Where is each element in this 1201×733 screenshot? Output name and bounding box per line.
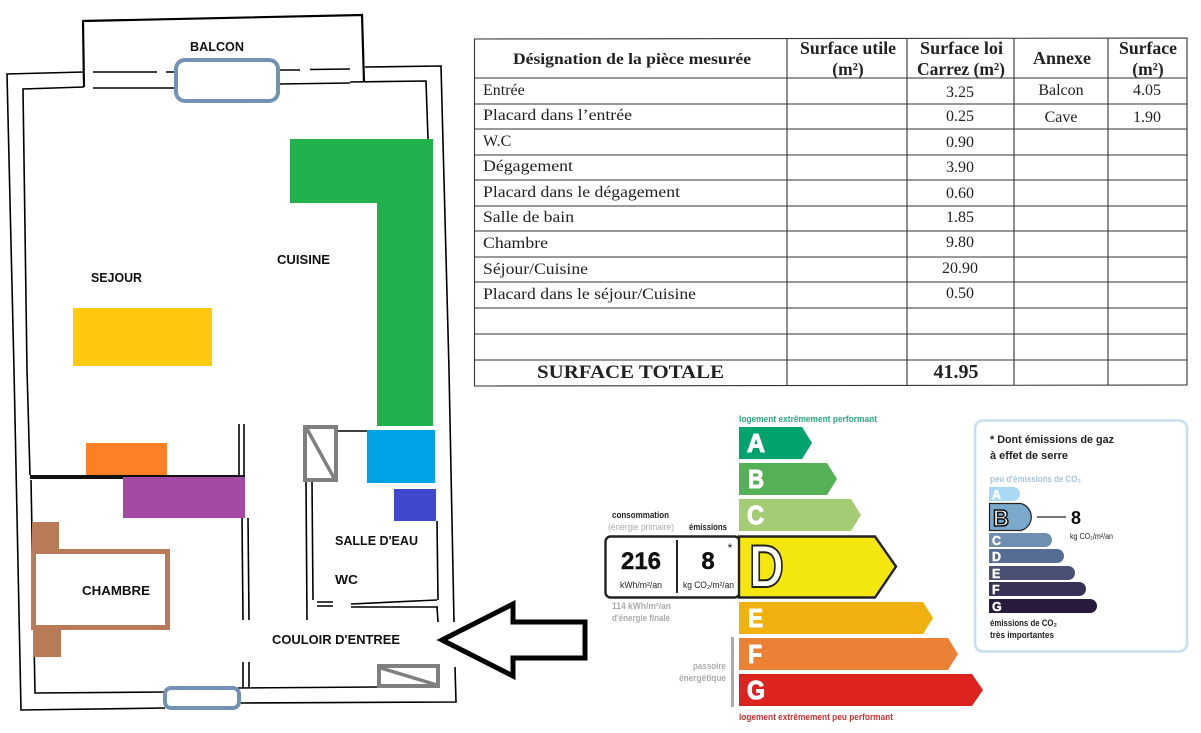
consumption heading: consommation [612,510,669,520]
energy class A [739,427,812,459]
top caption: logement extrêmement performant [739,414,877,424]
final energy note [612,601,671,623]
outer and inner walls [7,15,456,710]
washbasin [394,489,436,521]
table header: Annexe [1033,48,1091,68]
class A: A [992,488,1001,502]
energy class C: C [747,500,764,530]
Carrez values: 0.60 [946,185,974,202]
value leader line [1037,516,1066,518]
room names: Entrée [483,82,525,99]
total row: 41.95 [934,361,978,383]
class D [989,549,1064,564]
table header: Surface loi [920,38,1003,58]
bottom scale caption: émissions de CO₂ [990,618,1057,628]
passoire label: énergétique [679,673,726,683]
energy class B [739,463,837,495]
table header: (m²) [1132,59,1164,79]
icon: entry door [379,666,438,686]
bottom scale caption: très importantes [990,630,1054,640]
energy class E [739,602,933,634]
energy class F: F [748,639,762,669]
room names: Salle de bain [483,209,574,226]
consumption box: kWh/m²/an [620,580,662,590]
table grid [474,38,1187,386]
panel title: à effet de serre [990,450,1068,462]
purple wardrobe [123,477,245,518]
class D: D [992,550,1001,564]
label: balcon: BALCON [190,40,244,54]
energy class B: B [748,464,764,494]
energy class E: E [748,603,763,633]
class A [989,487,1020,502]
annexes: 1.90 [1133,109,1161,126]
kitchen counter [290,139,433,426]
consumption box: 216 [621,548,661,575]
final energy note: 114 kWh/m²/an [612,601,671,611]
Carrez values: 3.25 [946,84,974,101]
top scale caption: peu d'émissions de CO₂ [990,474,1081,484]
consumption box: * [728,541,733,555]
class B highlighted: B [993,505,1009,531]
label: salle d'eau: SALLE D'EAU [335,534,418,548]
table header: Surface utile [800,38,896,58]
class F [989,582,1086,597]
primary energy note: (énergie primaire) [608,522,674,532]
passoire bar [731,637,734,707]
room names: Placard dans le dégagement [483,184,681,201]
table header: Désignation de la pièce mesurée [513,51,751,68]
table header: Surface [1119,38,1177,58]
class E [989,566,1075,581]
class C [989,533,1052,548]
final energy note: d'énergie finale [612,613,670,623]
Carrez values: 0.90 [946,134,974,151]
Carrez values: 9.80 [946,234,974,251]
room names: Chambre [483,235,548,252]
room names: W.C [483,133,511,150]
label: couloir d'entree: COULOIR D'ENTREE [272,633,400,647]
total row: SURFACE TOTALE [537,362,724,383]
consumption box [606,536,740,598]
annexes: 4.05 [1133,82,1161,99]
partition wall [30,475,245,479]
panel: energy rating [606,414,983,722]
passoire label [679,661,726,683]
label: wc: WC [335,573,358,587]
class E: E [992,567,1000,581]
label: cuisine: CUISINE [277,253,330,267]
energy class D highlighted: D [749,533,784,600]
label: sejour: SEJOUR [91,271,142,285]
consumption box: kg CO₂/m²/an [683,580,734,590]
value 8: 8 [1071,508,1081,528]
icon: window top [176,60,278,101]
annexes: Balcon [1038,82,1084,99]
table header [513,38,1177,79]
panel frame [975,420,1187,652]
panel: greenhouse gas emissions [975,420,1187,652]
room names: Placard dans l’entrée [483,107,632,124]
energy class D highlighted [739,533,896,600]
class G [989,599,1097,614]
icon: door bathroom [305,427,336,480]
class G: G [992,600,1002,614]
panel: surface table [474,38,1187,386]
orange furniture [86,443,167,475]
Carrez values: 1.85 [946,209,974,226]
total row [537,361,978,383]
Carrez values [942,84,978,302]
Carrez values: 20.90 [942,260,978,277]
annexes: Cave [1045,109,1077,126]
label: chambre: CHAMBRE [82,584,150,598]
arrow: entrance [442,604,585,676]
value unit: kg CO₂/m²/an [1070,532,1113,541]
energy class F [739,638,958,670]
Carrez values: 0.25 [946,108,974,125]
energy class C [739,499,861,531]
consumption box: 8 [701,548,715,575]
bed and nightstands [31,522,170,657]
icon: window bottom [165,688,239,708]
emissions heading: émissions [689,522,727,532]
table header: Carrez (m²) [917,59,1005,79]
room names: Séjour/Cuisine [483,261,588,278]
room names [483,82,696,303]
passoire label: passoire [693,661,726,671]
class B highlighted [990,504,1031,531]
annexes [1038,82,1161,126]
shower [367,430,435,483]
panel title: * Dont émissions de gaz [990,434,1114,446]
bottom caption: logement extrêmement peu performant [739,712,893,722]
room names: Placard dans le séjour/Cuisine [483,286,696,303]
table header: (m²) [832,59,864,79]
sofa [73,308,212,366]
energy class G [739,674,983,706]
panel title [990,434,1114,462]
class C: C [992,534,1001,548]
bottom scale caption [990,618,1057,640]
panel: floor plan [7,15,585,710]
class F: F [992,583,1000,597]
room names: Dégagement [483,158,574,175]
energy class A: A [747,428,765,458]
energy class G: G [747,675,765,705]
Carrez values: 3.90 [946,159,974,176]
Carrez values: 0.50 [946,285,974,302]
